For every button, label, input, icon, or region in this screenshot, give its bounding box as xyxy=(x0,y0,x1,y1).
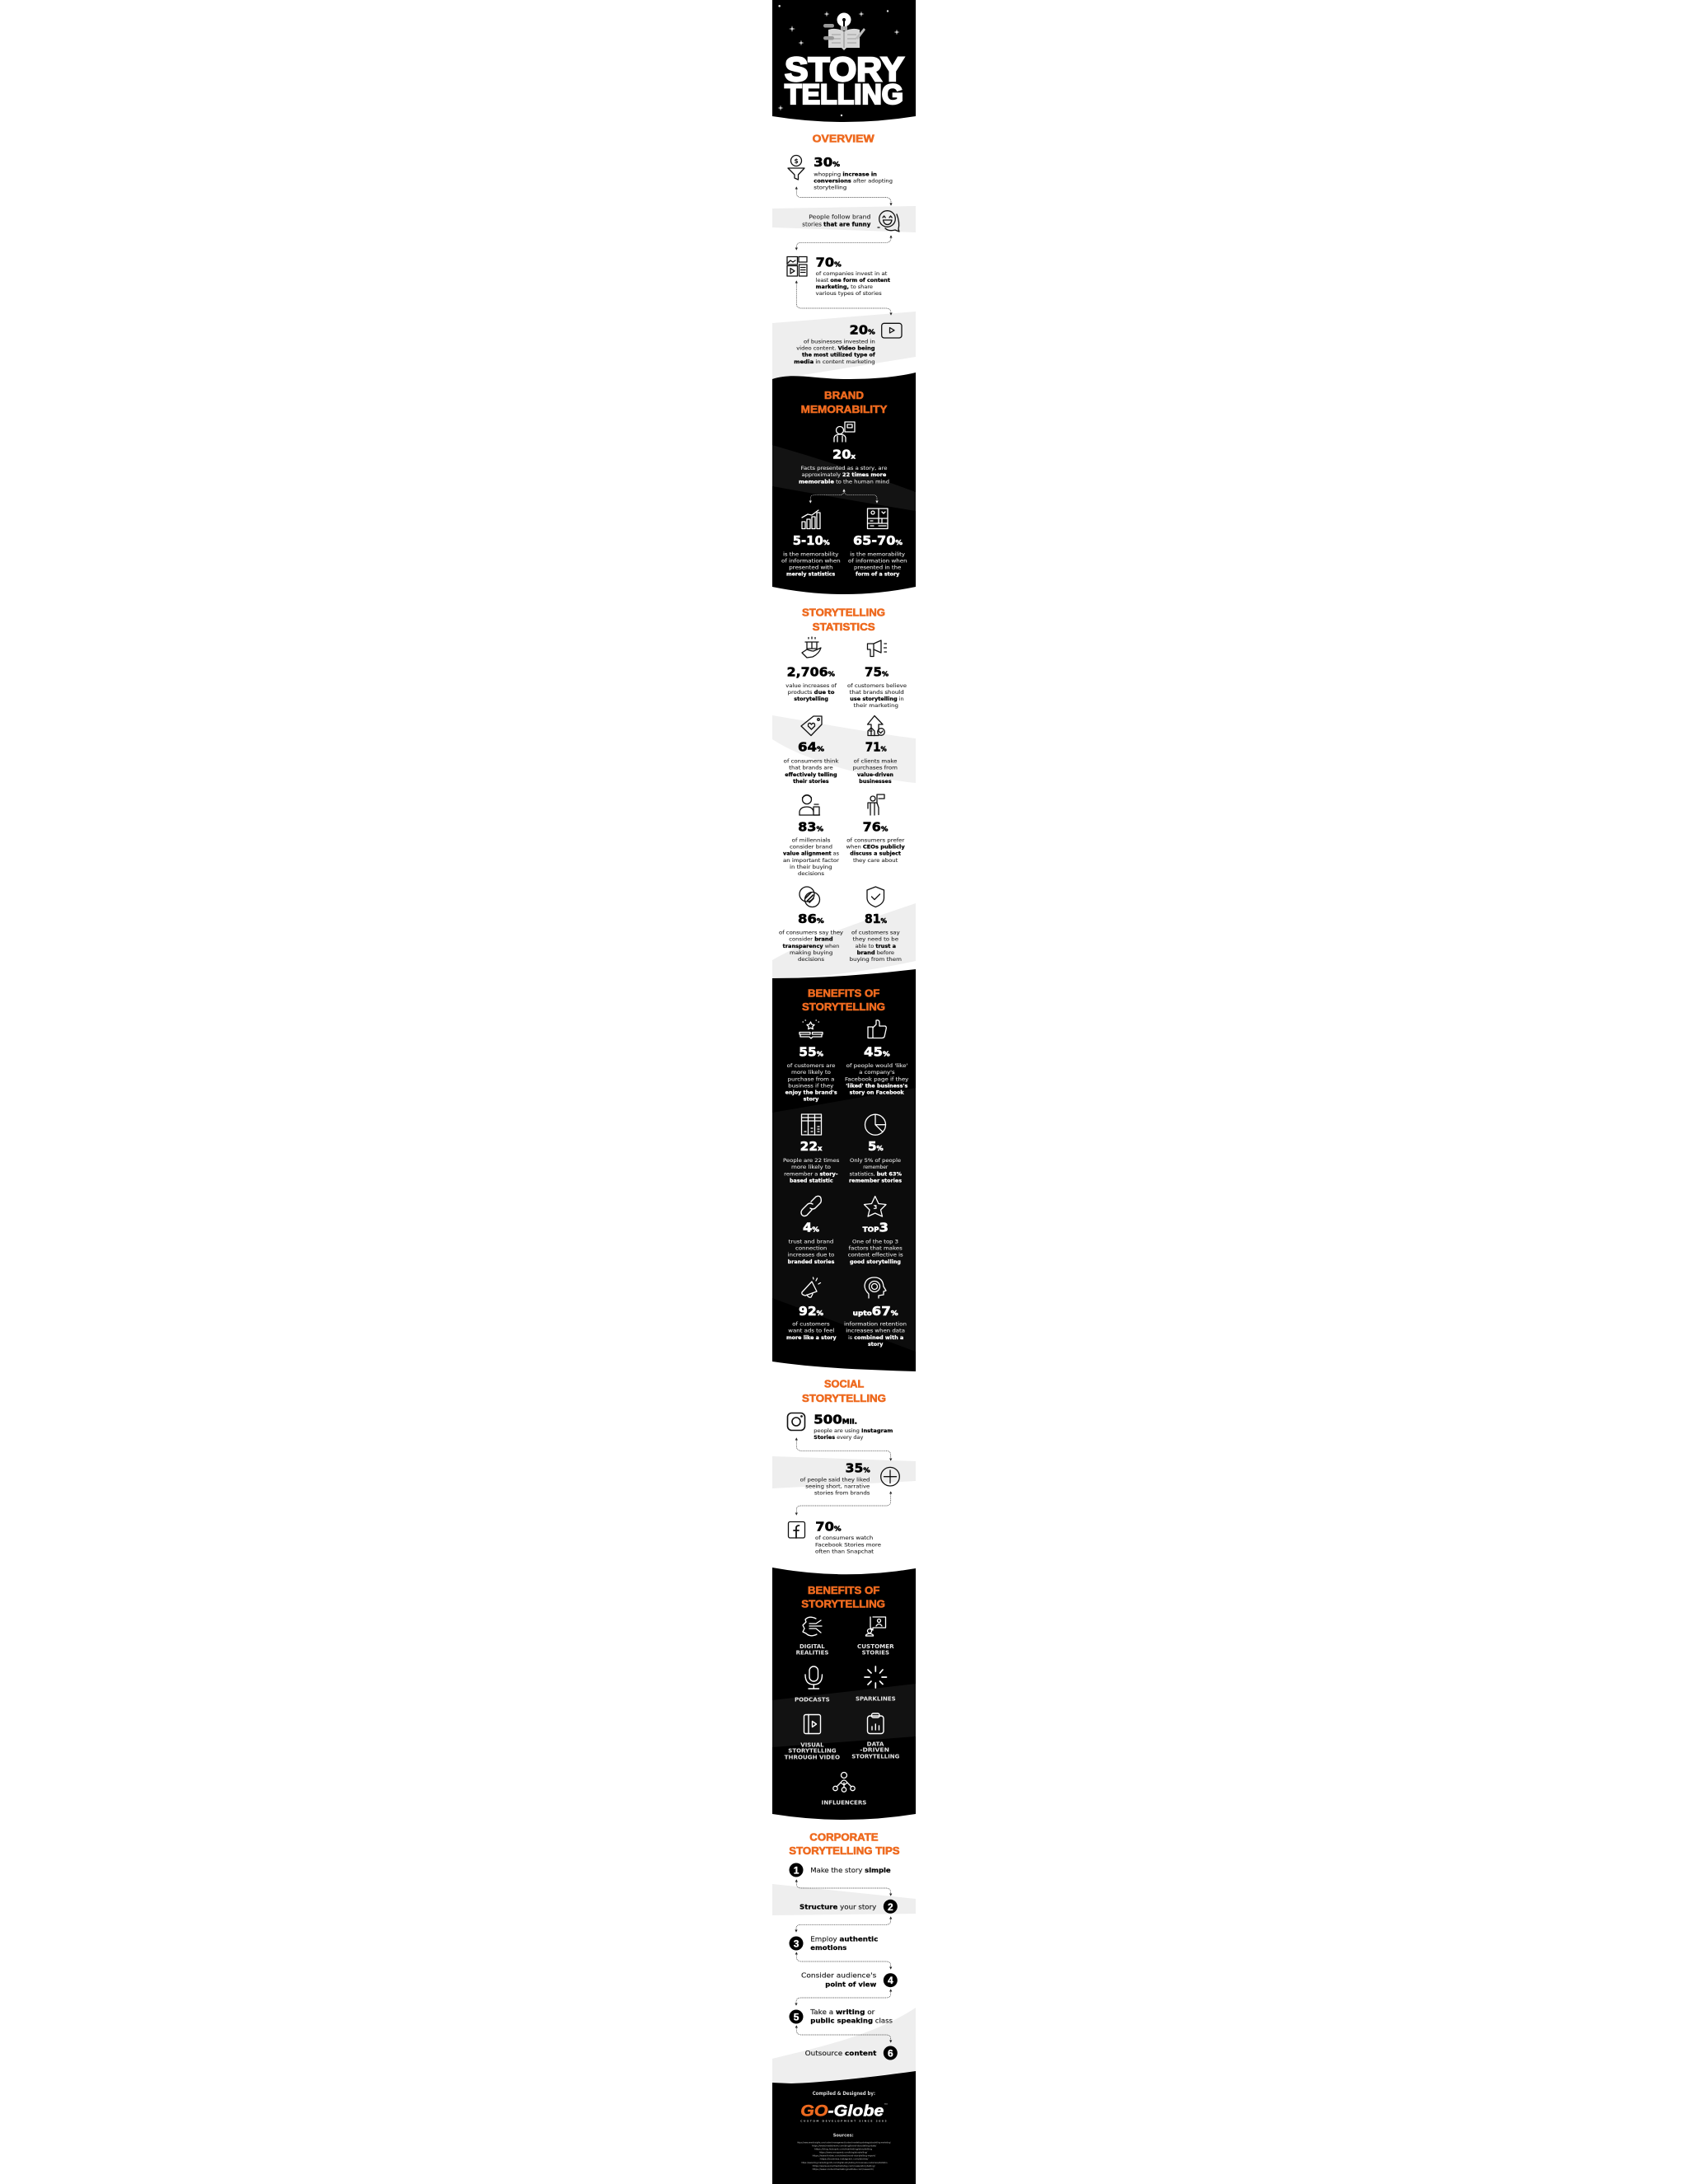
stat: 86%: making buying xyxy=(790,950,833,956)
stat: 20% video: media in content marketing xyxy=(794,359,875,365)
stat: 83%: decisions xyxy=(798,871,824,877)
stat: 76%: they care about xyxy=(853,858,898,864)
icon: megaphone ad xyxy=(802,1277,821,1297)
icon: chain link xyxy=(801,1196,821,1216)
stat: 5%: statistics, but 63% xyxy=(850,1171,902,1177)
item: data driven storytelling: DATA xyxy=(867,1741,884,1747)
stat: 70% content marketing: of companies invest in at xyxy=(816,271,888,277)
stat: 45%: 45 % xyxy=(864,1045,890,1060)
stat: 5-10%: 5-10% xyxy=(793,533,830,548)
stat: 71%: value-driven xyxy=(857,772,893,778)
item: visual storytelling through video: STORYTELLING xyxy=(788,1748,837,1755)
stat: 75%: of customers believe xyxy=(847,683,907,689)
stat: 20% video: video content. Video being xyxy=(796,346,875,352)
stat: 65-70%: presented in the xyxy=(854,565,902,570)
stat: people follow funny stories xyxy=(802,214,871,227)
item: digital realities xyxy=(796,1617,829,1657)
panel: storytelling statistics xyxy=(772,607,916,978)
panel: title header xyxy=(772,0,916,122)
arrow: connector 3 to 4 xyxy=(796,1953,891,1968)
logo: GO-Globe: TM xyxy=(884,2102,888,2106)
stat: 4%: connection xyxy=(795,1246,828,1252)
tip 1: Make the story simple xyxy=(810,1867,891,1874)
stat: 4% xyxy=(788,1221,835,1265)
icon: overlapping circles xyxy=(799,887,819,907)
title: STORY TELLING xyxy=(785,50,904,110)
stat: 30%: conversions after adopting xyxy=(814,178,893,184)
stat: 65-70%: 65-70 % xyxy=(853,533,903,548)
icon: open book with light bulb xyxy=(823,13,865,50)
tip 4: point of view xyxy=(825,1981,877,1989)
arrow: connector 2 to 3 xyxy=(796,1918,891,1931)
tip 6 xyxy=(805,2046,898,2060)
item: data driven storytelling xyxy=(851,1713,900,1760)
stat: 5-10%: of information when xyxy=(781,558,841,564)
tip 3: 3 xyxy=(794,1938,799,1950)
stat: upto 67%: upto67 % xyxy=(853,1304,898,1319)
stat: 81%: of customers say xyxy=(851,930,900,936)
stat: 20x memorable: Facts presented as a story, are xyxy=(801,466,888,471)
panel: footer xyxy=(772,2071,916,2184)
stat: 20x memorable xyxy=(799,448,889,485)
heading: corporate storytelling tips: CORPORATE xyxy=(809,1830,879,1843)
tip 6: Outsource content xyxy=(805,2050,877,2057)
stat: 22x: based statistic xyxy=(790,1178,833,1183)
stat: 70% content marketing: least one form of content xyxy=(816,278,890,284)
stat: 5%: Only 5% of people xyxy=(850,1158,901,1164)
tip 5: public speaking class xyxy=(810,2018,893,2025)
stat: 70% content marketing: marketing, to share xyxy=(816,284,873,290)
stat: 71%: purchases from xyxy=(853,766,898,771)
stat: 92%: 92% xyxy=(799,1304,823,1319)
stat: 30%: storytelling xyxy=(814,185,847,190)
stat: 35%: seeing short, narrative xyxy=(805,1484,870,1490)
stat: 22x: more likely to xyxy=(791,1165,831,1170)
stat: 55%: story xyxy=(804,1097,818,1103)
stat: 4%: increases due to xyxy=(788,1253,835,1258)
stat: 64%: that brands are xyxy=(789,766,833,771)
stat: 55%: enjoy the brand's xyxy=(785,1090,837,1095)
stat: 76% xyxy=(846,819,905,864)
panel: benefits of storytelling (types) xyxy=(772,1568,916,1820)
decorative stars xyxy=(778,5,900,116)
stat: upto 67% xyxy=(844,1304,907,1347)
stat: 30%: whopping increase in xyxy=(814,171,877,177)
stat: 4%: branded stories xyxy=(788,1259,835,1265)
stat: 65-70% xyxy=(848,533,907,577)
icon: arrows up with check xyxy=(867,715,884,735)
stat: top 3: factors that makes xyxy=(849,1246,903,1252)
stat: 20% video: the most utilized type of xyxy=(802,353,875,359)
stat: people follow funny stories: People follow brand xyxy=(809,214,870,221)
arrow: connector 70% to 20% xyxy=(796,282,891,314)
item: visual storytelling through video: THROUGH VIDEO xyxy=(785,1754,840,1760)
icon: thumbs up xyxy=(868,1020,886,1038)
arrow: connector 4 to 5 xyxy=(796,1990,891,2004)
panel: benefits of storytelling (stats) xyxy=(772,969,916,1371)
stat: 4%: 4% xyxy=(803,1221,819,1235)
stat: 76%: when CEOs publicly xyxy=(846,845,905,851)
stat: 30% xyxy=(814,155,893,190)
icon: book with star xyxy=(799,1020,823,1038)
stat: 20x memorable: memorable to the human mind xyxy=(799,479,889,485)
arrow: connector instagram to 35% xyxy=(796,1439,891,1460)
icon: instagram xyxy=(788,1413,804,1431)
stat: 81% xyxy=(850,912,902,963)
icon: plus circle xyxy=(881,1467,899,1486)
icon: star with 3: 3 xyxy=(874,1204,877,1211)
icon: dollar funnel xyxy=(788,155,804,180)
stat: 5%: 5% xyxy=(868,1139,884,1154)
heading: social storytelling: STORYTELLING xyxy=(802,1392,886,1404)
sources list: https://business.instagram.com/stories/ xyxy=(820,2158,868,2161)
stat: 45%: of people would 'like' xyxy=(846,1063,908,1069)
heading: benefits of storytelling: STORYTELLING xyxy=(801,1598,885,1610)
stat: 86%: 86 % xyxy=(798,912,824,926)
stat: 2,706%: products due to xyxy=(788,690,834,696)
item: data driven storytelling: -DRIVEN xyxy=(860,1747,889,1754)
arrow: connector 30% to funny xyxy=(796,188,891,204)
stat: 5-10%: merely statistics xyxy=(786,571,836,577)
stat: 86%: decisions xyxy=(798,957,824,963)
stat: 5-10% xyxy=(781,533,841,577)
stat: 75% xyxy=(847,665,907,709)
stat: 20% video: 20% xyxy=(850,323,875,338)
stat: 35%: 35% xyxy=(846,1461,870,1476)
stat: top 3 xyxy=(848,1221,903,1265)
heading: brand memorability: BRAND xyxy=(824,389,864,401)
stat: 83%: value alignment as xyxy=(783,851,839,857)
sources list: https://www.smartinsights.com/content-management/content-marketing-strategy/storytelling-marketing/ xyxy=(797,2141,891,2144)
stat: 30%: 30 % xyxy=(814,155,840,170)
stat: 65-70%: is the memorability xyxy=(850,551,905,557)
heading: benefits of storytelling xyxy=(802,987,885,1013)
arrow: connector 1 to 2 xyxy=(796,1881,891,1895)
icon: dollar funnel: $ xyxy=(795,157,799,165)
stat: upto 67%: story xyxy=(868,1342,883,1347)
stat: 45%: 'liked' the business's xyxy=(846,1083,908,1089)
sources list: https://www.blog.marketingprofs.com/digital-storytelling-for-business-customers/statistics xyxy=(801,2161,888,2164)
stat: 500 mil: people are using Instagram xyxy=(814,1428,893,1434)
tip 3: Employ authentic xyxy=(810,1935,879,1943)
heading: benefits of storytelling: BENEFITS OF xyxy=(808,987,879,999)
stat: 71%: businesses xyxy=(859,779,892,785)
credit line: Compiled & Designed by: xyxy=(813,2090,875,2097)
stat: 45%: a company's xyxy=(859,1070,895,1076)
stat: 22x: People are 22 times xyxy=(783,1158,839,1164)
stat: 75%: that brands should xyxy=(850,690,904,696)
heading: storytelling statistics: STORYTELLING xyxy=(802,607,885,619)
item: customer stories: CUSTOMER xyxy=(857,1643,894,1650)
tip 1 xyxy=(790,1863,891,1877)
stat: upto 67%: information retention xyxy=(844,1322,907,1328)
tip 5: Take a writing or xyxy=(809,2008,875,2016)
stat: 20% video xyxy=(794,323,875,365)
stat: 76%: of consumers prefer xyxy=(846,838,905,844)
arrow: split connector xyxy=(810,490,877,502)
item: digital realities: DIGITAL xyxy=(799,1643,825,1650)
heading: brand memorability: MEMORABILITY xyxy=(801,403,888,415)
stat: 22x xyxy=(783,1139,839,1183)
sources list: https://www.socialmediatoday.com/news/storytelling/ xyxy=(813,2164,875,2168)
stat: 81%: brand before xyxy=(857,950,894,956)
stat: 5-10%: is the memorability xyxy=(783,551,839,557)
heading: benefits of storytelling: BENEFITS OF xyxy=(808,1584,879,1596)
icon: facebook xyxy=(788,1521,804,1538)
stat: 92%: want ads to feel xyxy=(788,1329,835,1334)
stat: 92% xyxy=(786,1304,837,1341)
sources list: https://www.oneupweb.com/blog/storytelling/ xyxy=(819,2151,867,2154)
icon: heart tag xyxy=(801,716,822,735)
stat: 70% content marketing: various types of stories xyxy=(816,291,882,297)
stat: 70% facebook stories: of consumers watch xyxy=(815,1535,874,1541)
stat: 35%: of people said they liked xyxy=(800,1477,870,1483)
heading: corporate storytelling tips: STORYTELLING TIPS xyxy=(789,1844,900,1857)
stat: 92%: of customers xyxy=(792,1322,830,1328)
sources list: https://blog.hubspot.com/marketing/storytelling xyxy=(814,2148,872,2151)
tip 2 xyxy=(799,1900,898,1914)
panel: overview xyxy=(772,133,916,380)
stat: top 3: good storytelling xyxy=(850,1259,901,1265)
icon: head with clock xyxy=(865,1277,886,1298)
stat: 22x: 22x xyxy=(800,1139,823,1154)
stat: top 3: TOP3 xyxy=(863,1221,889,1235)
icon: presenter with board xyxy=(834,422,855,442)
panel: brand memorability xyxy=(772,373,916,594)
sources list: https://www.forbes.com/sites/brand-storytelling-report/ xyxy=(813,2154,875,2158)
stat: 35% xyxy=(800,1461,870,1497)
arrow: connector 5 to 6 xyxy=(796,2027,891,2041)
stat: 71%: of clients make xyxy=(854,759,898,765)
item: podcasts: PODCASTS xyxy=(795,1697,830,1704)
stat: 55%: 55% xyxy=(799,1045,823,1060)
stat: top 3: One of the top 3 xyxy=(852,1240,898,1245)
icon: data columns xyxy=(801,1114,821,1135)
stat: 86%: of consumers say they xyxy=(779,930,844,936)
stat: 83%: an important factor xyxy=(783,858,840,864)
sources list: https://www.contentmarketinginstitute.com/research/ xyxy=(813,2168,874,2171)
stat: 20x memorable: 20x xyxy=(832,448,856,462)
title: STORY TELLING: TELLING xyxy=(785,79,903,110)
stat: 83%: consider brand xyxy=(790,845,832,851)
tip 3: emotions xyxy=(810,1944,847,1952)
stat: 75%: 75% xyxy=(865,665,889,680)
stat: 70% facebook stories: Facebook Stories more xyxy=(815,1542,881,1548)
stat: 81%: buying from them xyxy=(850,957,902,963)
stat: 70% facebook stories xyxy=(815,1519,881,1554)
heading: brand memorability xyxy=(801,389,888,415)
stat: 45%: Facebook page if they xyxy=(845,1076,909,1082)
item: influencers: INFLUENCERS xyxy=(822,1799,867,1806)
tip 6: 6 xyxy=(888,2047,893,2059)
stat: 70% facebook stories: 70% xyxy=(815,1519,842,1534)
logo: GO-Globe: GO-Globe xyxy=(800,2102,884,2120)
heading: benefits of storytelling xyxy=(801,1584,885,1610)
stat: 83%: in their buying xyxy=(790,865,832,870)
tip 4 xyxy=(801,1971,898,1989)
sources list: https://www.headstream.com/blog/brand-storytelling-stats/ xyxy=(812,2144,876,2148)
stat: 92%: more like a story xyxy=(786,1335,837,1341)
stat: 55%: more likely to xyxy=(791,1070,831,1076)
tip 4: Consider audience's xyxy=(801,1971,876,1979)
item: sparklines: SPARKLINES xyxy=(856,1695,896,1702)
stat: upto 67%: increases when data xyxy=(846,1329,905,1334)
stat: 65-70%: of information when xyxy=(848,558,907,564)
tip 3 xyxy=(790,1935,879,1952)
stat: 70% facebook stories: often than Snapchat xyxy=(815,1549,874,1554)
stat: 71% xyxy=(853,740,898,785)
heading: corporate storytelling tips xyxy=(789,1830,900,1857)
stat: 35%: stories from brands xyxy=(814,1491,870,1497)
stat: 500 mil xyxy=(814,1412,893,1441)
icon: megaphone xyxy=(867,640,887,656)
stat: 81%: they need to be xyxy=(853,937,898,943)
sources list xyxy=(797,2141,891,2171)
icon: millennial at desk xyxy=(799,794,819,815)
stat: 75%: use storytelling in xyxy=(850,696,904,702)
stat: 55% xyxy=(785,1045,837,1103)
arrow: connector funny to 70% xyxy=(796,237,891,249)
stat: 2,706%: 2,706 % xyxy=(787,665,835,680)
stat: 70% content marketing xyxy=(816,255,890,297)
stat: 55%: business if they xyxy=(788,1083,834,1089)
tip 2: 2 xyxy=(888,1901,893,1913)
stat: 86%: transparency when xyxy=(783,944,840,949)
item: visual storytelling through video xyxy=(785,1714,840,1760)
stat: 500 mil: Stories every day xyxy=(814,1435,864,1441)
stat: 64%: 64 % xyxy=(798,740,824,755)
stat: 5%: remember xyxy=(863,1165,889,1170)
stat: 20x memorable: approximately 22 times more xyxy=(802,472,886,478)
stat: 86% xyxy=(779,912,844,963)
item: digital realities: REALITIES xyxy=(796,1650,829,1657)
item: visual storytelling through video: VISUAL xyxy=(800,1741,824,1748)
icon: star with 3 xyxy=(864,1197,886,1216)
stat: 2,706%: storytelling xyxy=(794,696,828,702)
stat: 55%: of customers are xyxy=(787,1063,836,1069)
item: customer stories xyxy=(857,1617,894,1657)
stat: 500 mil: 500 Mil. xyxy=(814,1412,857,1427)
stat: 76%: 76% xyxy=(863,819,888,834)
stat: 75%: their marketing xyxy=(854,703,898,709)
stat: upto 67%: is combined with a xyxy=(848,1335,903,1341)
stat: 4%: trust and brand xyxy=(789,1240,834,1245)
stat: 81%: 81% xyxy=(865,912,887,926)
tip 4: 4 xyxy=(888,1975,893,1986)
arrow: connector 35% to facebook xyxy=(796,1493,891,1514)
stat: 45% xyxy=(845,1045,909,1095)
stat: 86%: consider brand xyxy=(789,937,833,943)
stat: 2,706%: value increases of xyxy=(785,683,837,689)
heading: benefits of storytelling: STORYTELLING xyxy=(802,1001,885,1013)
stat: 64%: of consumers think xyxy=(784,759,839,765)
stat: 76%: discuss a subject xyxy=(850,851,901,857)
icon: growth bars xyxy=(802,510,820,529)
heading: storytelling statistics xyxy=(802,607,885,633)
icon: box in hand xyxy=(802,637,821,658)
stat: 64%: effectively telling xyxy=(785,772,837,778)
heading: storytelling statistics: STATISTICS xyxy=(813,621,875,633)
stat: 5-10%: presented with xyxy=(789,565,833,570)
stat: 20% video: of businesses invested in xyxy=(804,340,875,345)
stat: 83%: of millennials xyxy=(792,838,830,844)
logo: GO-Globe: CUSTOM DEVELOPMENT SINCE 2005 xyxy=(800,2119,887,2122)
stat: 55%: purchase from a xyxy=(788,1076,835,1082)
tip 5 xyxy=(790,2008,893,2025)
sources heading: Sources: xyxy=(833,2133,854,2138)
heading: overview: OVERVIEW xyxy=(813,133,874,145)
item: influencers xyxy=(822,1772,867,1806)
panel: corporate storytelling tips xyxy=(772,1830,916,2083)
stat: 45%: story on Facebook xyxy=(850,1090,905,1095)
stat: 81%: able to trust a xyxy=(856,944,896,949)
heading: social storytelling: SOCIAL xyxy=(824,1378,864,1390)
stat: 2,706% xyxy=(785,665,837,702)
stat: 70% content marketing: 70% xyxy=(816,255,842,269)
heading: social storytelling xyxy=(802,1378,886,1404)
item: podcasts xyxy=(795,1666,830,1704)
icon: shield check xyxy=(867,887,884,907)
icon: CEO with flag xyxy=(868,794,884,815)
stat: 65-70%: form of a story xyxy=(856,571,899,577)
icon: dashboard xyxy=(867,509,888,529)
icon: pie chart xyxy=(865,1114,885,1135)
stat: 5% xyxy=(849,1139,902,1183)
icon: content layout xyxy=(787,257,807,276)
item: data driven storytelling: STORYTELLING xyxy=(851,1753,900,1760)
icon: laughing face bubble xyxy=(878,211,899,232)
tip 1: 1 xyxy=(794,1864,799,1876)
stat: 5%: remember stories xyxy=(849,1178,902,1183)
stat: top 3: content effective is xyxy=(848,1253,903,1258)
item: sparklines xyxy=(856,1666,896,1702)
tip 5: 5 xyxy=(794,2011,799,2022)
tip 2: Structure your story xyxy=(799,1904,877,1911)
stat: 83% xyxy=(783,819,840,877)
stat: 83%: 83% xyxy=(798,819,823,834)
panel: social storytelling xyxy=(772,1378,916,1554)
title: STORY TELLING: STORY xyxy=(785,50,904,88)
icon: video play button xyxy=(882,323,902,338)
item: customer stories: STORIES xyxy=(862,1650,889,1657)
stat: people follow funny stories: stories that are funny xyxy=(802,221,871,227)
stat: 64% xyxy=(784,740,839,785)
stat: 22x: remember a story- xyxy=(784,1171,838,1177)
stat: 64%: their stories xyxy=(793,779,829,785)
stat: 71%: 71% xyxy=(865,740,887,755)
